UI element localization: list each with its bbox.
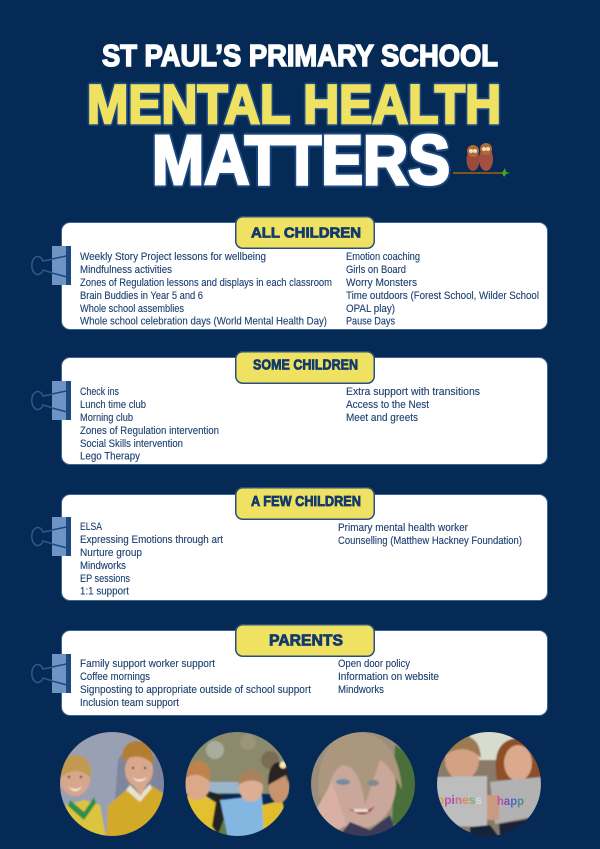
list: all children right: Girls on Board	[346, 264, 406, 276]
panel: some children	[61, 357, 548, 465]
title: school name: ST PAUL’S PRIMARY SCHOOL	[102, 38, 498, 73]
list: some children left	[80, 386, 219, 463]
list: all children right: OPAL play)	[346, 302, 395, 314]
list: all children left	[80, 251, 332, 327]
title: matters: MATTERS	[152, 121, 450, 199]
list: a few children left: 1:1 support	[80, 586, 129, 598]
title: mental health: MENTAL HEALTH	[87, 73, 501, 135]
list: a few children right: Primary mental health worker	[338, 522, 468, 534]
list: all children left: Mindfulness activities	[80, 264, 172, 276]
list: a few children right: Counselling (Matthew Hackney Foundation)	[338, 535, 522, 547]
photo: smiling child with hand	[310, 730, 418, 838]
list: all children left: Whole school celebration days (World Mental Health Day)	[80, 315, 327, 327]
list: parents left: Coffee mornings	[80, 671, 150, 683]
list: a few children left: Mindworks	[80, 560, 126, 572]
list: a few children right	[338, 522, 522, 547]
photo: two boys in yellow shirts	[58, 730, 166, 838]
panel: all children	[61, 222, 548, 330]
list: parents right	[338, 658, 439, 696]
photo: two girls with colouring sheets: ppiness	[437, 793, 482, 807]
list: some children right: Access to the Nest	[346, 399, 429, 411]
list: some children left: Lego Therapy	[80, 451, 141, 463]
title: mental health: MENTAL HEALTH	[87, 73, 501, 135]
list: all children left: Brain Buddies in Year 5 and 6	[80, 289, 203, 301]
list: parents right: Mindworks	[338, 684, 384, 696]
heading: some children	[235, 351, 375, 384]
list: some children left: Morning club	[80, 412, 133, 424]
list: some children left: Lunch time club	[80, 399, 146, 411]
list: parents left	[80, 658, 311, 709]
panel: parents	[61, 630, 548, 716]
icon: binder clip	[31, 654, 72, 693]
list: a few children left: EP sessions	[80, 573, 130, 585]
photo: two girls with colouring sheets	[436, 730, 544, 838]
icon: owls on a branch	[453, 143, 510, 177]
list: some children left: Zones of Regulation intervention	[80, 425, 219, 437]
list: a few children left: Nurture group	[80, 547, 142, 559]
list: parents left: Family support worker support	[80, 658, 215, 670]
icon: binder clip	[31, 246, 72, 285]
heading: all children	[235, 216, 375, 249]
list: all children right: Time outdoors (Forest School, Wilder School	[346, 289, 539, 301]
list: parents left: Signposting to appropriate outside of school support	[80, 684, 311, 696]
heading: a few children: A FEW CHILDREN	[251, 493, 361, 510]
heading: parents: PARENTS	[269, 632, 343, 649]
photo: two girls with colouring sheets: happ	[497, 794, 524, 808]
list: parents right: Open door policy	[338, 658, 411, 670]
title: matters: MATTERS	[152, 121, 450, 199]
panel: a few children	[61, 494, 548, 601]
icon: binder clip	[31, 517, 72, 556]
list: all children left: Zones of Regulation lessons and displays in each classroom	[80, 277, 332, 289]
list: some children right	[346, 386, 480, 424]
heading: parents	[235, 624, 375, 657]
list: parents right: Information on website	[338, 671, 439, 683]
list: a few children left: ELSA	[80, 521, 103, 533]
list: a few children left: Expressing Emotions through art	[80, 534, 223, 546]
heading: all children: ALL CHILDREN	[251, 224, 361, 241]
list: some children right: Extra support with transitions	[346, 386, 480, 398]
photo row	[60, 732, 541, 836]
photo: three children outdoors	[184, 730, 292, 838]
title block	[87, 38, 510, 199]
list: all children right: Worry Monsters	[346, 277, 417, 289]
list: a few children left	[80, 521, 223, 598]
list: some children left: Social Skills intervention	[80, 438, 183, 450]
heading: some children: SOME CHILDREN	[253, 356, 358, 373]
list: all children left: Weekly Story Project lessons for wellbeing	[80, 251, 266, 263]
list: parents left: Inclusion team support	[80, 697, 179, 709]
list: all children left: Whole school assemblies	[80, 302, 184, 314]
list: all children right	[346, 251, 539, 327]
list: some children left: Check ins	[80, 386, 119, 398]
list: some children right: Meet and greets	[346, 412, 418, 424]
heading: a few children	[235, 487, 375, 520]
list: all children right: Pause Days	[346, 315, 395, 327]
list: all children right: Emotion coaching	[346, 251, 420, 263]
icon: binder clip	[31, 381, 72, 420]
